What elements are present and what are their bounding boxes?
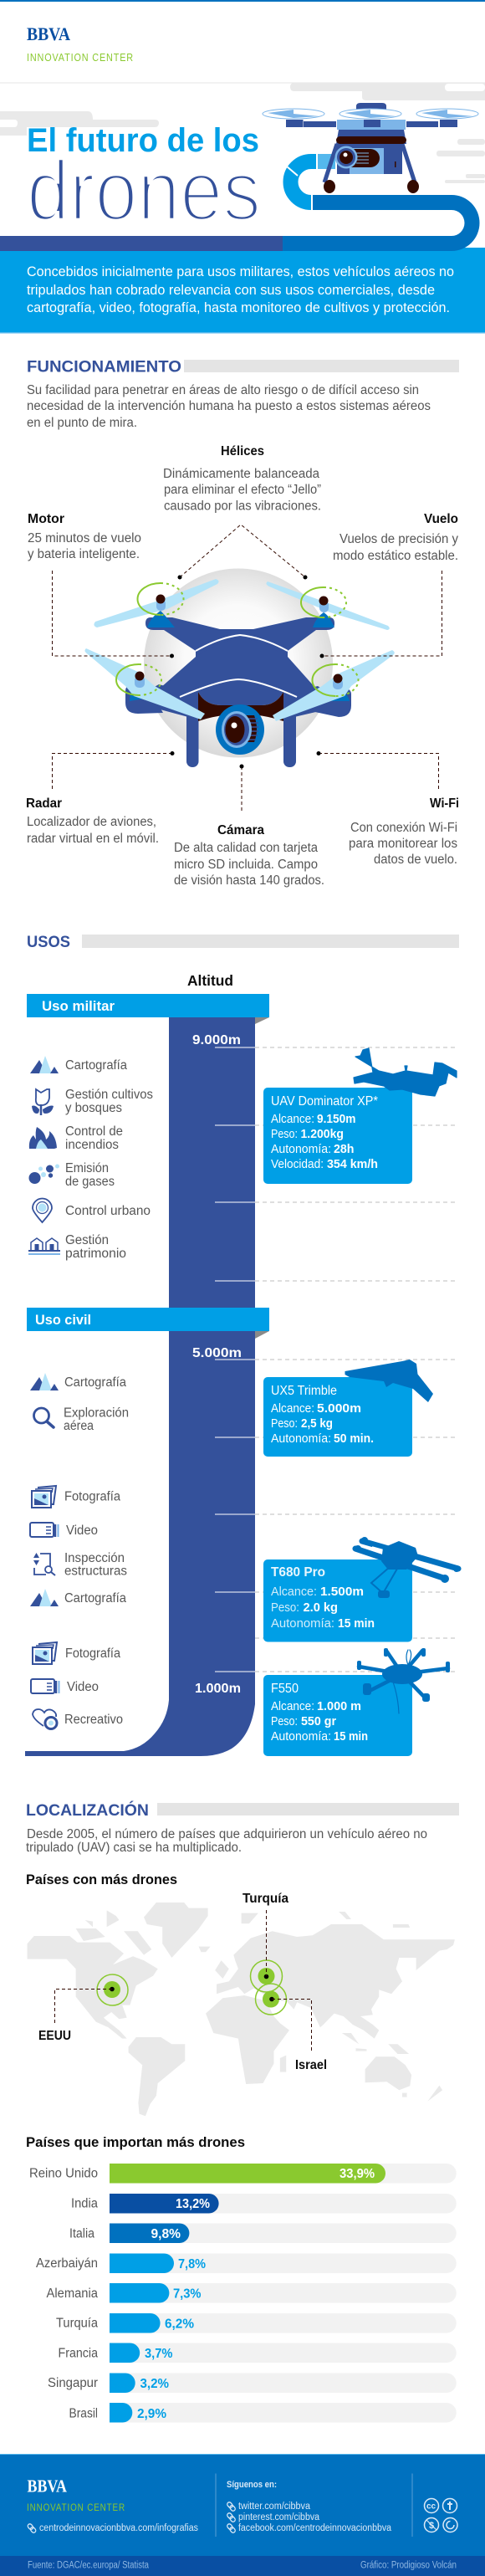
bar chart: drone importers: 2,9% <box>137 2407 166 2421</box>
drone card: F550: F550 <box>271 1682 299 1696</box>
map marker: EEUU: EEUU <box>38 2029 71 2043</box>
use item: Cartografía civil: Cartografía <box>64 1375 126 1390</box>
drone card: T680 Pro: 2.0 kg <box>303 1601 338 1615</box>
drone card: F550: Autonomía: <box>271 1730 331 1744</box>
callout: Wi-Fi: Wi-Fi <box>430 796 459 811</box>
label: 9.000m: 9.000m <box>192 1033 241 1047</box>
map marker: Turquía: Turquía <box>242 1892 288 1906</box>
footer logo: INNOVATION CENTER <box>27 2503 125 2513</box>
source and credits <box>28 2560 457 2570</box>
drone card: F550: 550 gr <box>301 1715 336 1728</box>
use item: Emisión de gases: de gases <box>65 1175 115 1189</box>
subheading: Países con más drones: Países con más drones <box>26 1872 177 1887</box>
drone card: UX5 Trimble <box>263 1377 412 1457</box>
drone card: UX5 Trimble: 2,5 kg <box>301 1417 333 1431</box>
bar chart: drone importers: 6,2% <box>165 2317 194 2331</box>
drone card: UAV Dominator XP: Alcance: <box>271 1113 314 1126</box>
use item: Control urbano <box>33 1198 151 1222</box>
use item: Exploración aérea: Exploración <box>64 1406 129 1421</box>
drone silhouette: F550 <box>357 1648 450 1713</box>
social links: pinterest.com/cibbva <box>238 2512 320 2522</box>
hero drone illustration <box>263 103 478 193</box>
funcionamiento intro text <box>27 383 431 430</box>
drone card: T680 Pro: 15 min <box>338 1617 375 1631</box>
section heading: Usos <box>27 933 459 951</box>
callout: Wi-Fi: Con conexión Wi-Fi <box>350 821 457 835</box>
use item: Recreativo <box>33 1709 123 1728</box>
use item: Gestión cultivos y bosques: Gestión cultivos <box>65 1088 153 1102</box>
use item: Inspección estructuras: Inspección <box>64 1551 125 1565</box>
drone card: UAV Dominator XP: 9.150m <box>317 1113 356 1126</box>
label: 1.000m: 1.000m <box>195 1682 241 1696</box>
drone card: F550: Alcance: <box>271 1700 314 1713</box>
bar chart: drone importers: Singapur <box>48 2376 98 2390</box>
callout: Wi-Fi <box>349 796 459 867</box>
callout: Cámara: de visión hasta 140 grados. <box>174 873 324 888</box>
use item: Gestión cultivos y bosques: y bosques <box>65 1101 122 1115</box>
social links <box>227 2480 392 2533</box>
drone card: UX5 Trimble: Autonomía: <box>271 1432 331 1446</box>
callout: Radar: Radar <box>26 796 62 811</box>
bar chart: drone importers: Italia <box>69 2227 94 2241</box>
callout: Motor <box>28 512 141 561</box>
callout: Vuelo <box>333 512 458 563</box>
use item: Emisión de gases <box>28 1161 115 1189</box>
use item: Fotografía civil 2: Fotografía <box>65 1646 120 1661</box>
hero intro text: tripulados han cobrado relevancia con sus usos comerciales, desde <box>27 283 435 298</box>
use item: Inspección estructuras <box>33 1551 127 1578</box>
callout: Vuelo: modo estático estable. <box>333 549 458 563</box>
subheading: Países que importan más drones: Países que importan más drones <box>26 2135 245 2150</box>
use item: Cartografía civil <box>30 1373 126 1390</box>
drone card: T680 Pro: Alcance: <box>271 1585 317 1599</box>
callout: Hélices: Hélices <box>221 444 264 458</box>
bar chart: drone importers: 13,2% <box>176 2197 210 2211</box>
source and credits: Fuente: DGAC/ec.europa/ Statista <box>28 2560 149 2570</box>
use item: Gestión cultivos y bosques <box>32 1088 153 1115</box>
drone silhouette: UAV Dominator <box>354 1048 457 1096</box>
hero title: drones <box>27 143 261 238</box>
drone card: UAV Dominator XP: Velocidad: <box>271 1158 324 1171</box>
use item: Cartografía <box>30 1056 127 1073</box>
drone card: UAV Dominator XP: 354 km/h <box>327 1158 378 1171</box>
drone card: UX5 Trimble: 5.000m <box>317 1402 361 1416</box>
drone card: F550: 1.000 m <box>317 1700 361 1713</box>
social links: twitter.com/cibbva <box>238 2502 311 2512</box>
callout: Hélices: causado por las vibraciones. <box>164 499 321 514</box>
banner: Uso civil: Uso civil <box>35 1312 91 1328</box>
callout: Hélices <box>163 444 321 514</box>
use item: Video civil 2 <box>31 1679 99 1694</box>
drone card: UAV Dominator XP: Peso: <box>271 1128 298 1141</box>
banner: Uso civil <box>27 1308 269 1339</box>
social links: Síguenos en: <box>227 2480 277 2490</box>
use item: Cartografía civil 2: Cartografía <box>64 1591 126 1606</box>
top accent bar <box>0 0 485 2</box>
drone card: T680 Pro: 1.500m <box>320 1585 364 1599</box>
use item: Fotografía civil <box>32 1486 120 1508</box>
source and credits: Gráfico: Prodigioso Volcán <box>360 2560 457 2570</box>
callout: Radar <box>26 796 159 846</box>
use item: Fotografía civil 2 <box>33 1642 120 1664</box>
callout: Hélices: Dinámicamente balanceada <box>163 467 319 481</box>
callout: Motor: y bateria inteligente. <box>28 547 140 561</box>
section heading: Funcionamiento: FUNCIONAMIENTO <box>27 358 181 376</box>
section heading: Funcionamiento <box>27 358 459 376</box>
use item: Fotografía civil: Fotografía <box>64 1489 120 1504</box>
bar chart: drone importers: 7,3% <box>173 2287 201 2301</box>
hero intro text: Concebidos inicialmente para usos militares, estos vehículos aéreos no <box>27 264 454 279</box>
use item: Gestión patrimonio: patrimonio <box>65 1247 126 1261</box>
footer logo: BBVA <box>27 2476 68 2497</box>
map marker: Israel <box>256 1984 327 2072</box>
callout: Cámara <box>174 823 324 888</box>
use item: Inspección estructuras: estructuras <box>64 1565 127 1578</box>
header logo: BBVA Innovation Center: INNOVATION CENTER <box>27 52 134 64</box>
use item: Emisión de gases: Emisión <box>65 1161 109 1175</box>
altitude grid lines <box>215 1047 457 1672</box>
drone card: T680 Pro: Autonomía: <box>271 1617 334 1631</box>
map marker: Turquía <box>242 1892 288 1992</box>
banner: Uso militar: Uso militar <box>42 998 115 1014</box>
callout: Wi-Fi: datos de vuelo. <box>374 853 457 867</box>
drone card: F550: Peso: <box>271 1715 298 1728</box>
drone card: UAV Dominator XP: UAV Dominator XP* <box>271 1094 378 1109</box>
callout: Wi-Fi: para monitorear los <box>349 837 457 851</box>
label: 5.000m: 5.000m <box>192 1346 242 1360</box>
callout: Motor: 25 minutos de vuelo <box>28 531 141 545</box>
drone card: UAV Dominator XP: 1.200kg <box>301 1128 344 1141</box>
use item: Exploración aérea <box>33 1406 129 1433</box>
drone card: UX5 Trimble: Peso: <box>271 1417 298 1431</box>
footer link: infografías: centrodeinnovacionbbva.com/infografias <box>39 2523 198 2533</box>
drone silhouette: T680 Pro <box>355 1537 460 1598</box>
bar chart: drone importers: 9,8% <box>151 2227 181 2241</box>
altitude axis title: Altitud <box>187 972 233 989</box>
banner: Uso militar <box>27 994 269 1024</box>
bar chart: drone importers: Alemania <box>47 2287 98 2301</box>
section heading: Localización <box>26 1800 459 1820</box>
use item: Gestión patrimonio <box>28 1233 126 1261</box>
use item: Control de incendios: incendios <box>65 1138 119 1152</box>
drone card: UAV Dominator XP: Autonomía: <box>271 1143 331 1156</box>
top-view quadcopter diagram <box>84 569 395 767</box>
bar chart: drone importers: Azerbaiyán <box>36 2256 98 2271</box>
callout: Cámara: micro SD incluida. Campo <box>174 858 318 872</box>
bar chart: drone importers: 33,9% <box>340 2167 375 2181</box>
drone card: UX5 Trimble: 50 min. <box>334 1432 374 1446</box>
bar chart: drone importers: Francia <box>59 2346 98 2361</box>
bar chart: drone importers: 7,8% <box>178 2257 206 2271</box>
world map <box>28 1903 455 2116</box>
use item: Control de incendios <box>29 1124 123 1152</box>
use item: Video civil 2: Video <box>67 1680 99 1694</box>
bar chart: drone importers: Brasil <box>69 2406 98 2421</box>
use item: Gestión patrimonio: Gestión <box>65 1233 109 1247</box>
use item: Control de incendios: Control de <box>65 1124 123 1139</box>
callout: Cámara: De alta calidad con tarjeta <box>174 841 318 855</box>
use item: Exploración aérea: aérea <box>64 1419 94 1433</box>
leader lines for the diagram callouts <box>52 525 442 811</box>
callout: Hélices: para eliminar el efecto “Jello” <box>164 483 321 497</box>
drone card: UX5 Trimble: Alcance: <box>271 1402 314 1416</box>
footer panel <box>0 2454 485 2576</box>
creative commons icons: cc <box>426 2502 436 2512</box>
bar chart: drone importers: Reino Unido <box>29 2167 98 2180</box>
hero intro text <box>27 264 454 315</box>
bar chart: drone importers: India <box>71 2197 98 2210</box>
footer logo <box>27 2476 125 2513</box>
drone card: F550 <box>263 1675 412 1756</box>
drone card: F550: 15 min <box>334 1730 368 1744</box>
section heading: Usos: USOS <box>27 933 70 951</box>
callout: Vuelo: Vuelo <box>424 512 458 526</box>
bar chart: drone importers: 3,2% <box>140 2377 169 2391</box>
drone card: UAV Dominator XP <box>263 1088 412 1184</box>
callout: Radar: Localizador de aviones, <box>27 815 156 829</box>
hero blue ribbon path <box>0 154 485 332</box>
altitude column <box>25 1017 255 1756</box>
callout: Radar: radar virtual en el móvil. <box>27 832 159 846</box>
funcionamiento intro text: en el punto de mira. <box>27 416 137 430</box>
use item: Video civil: Video <box>66 1524 98 1538</box>
use item: Video civil <box>30 1523 98 1538</box>
callout: Motor: Motor <box>28 512 64 526</box>
drone card: UX5 Trimble: UX5 Trimble <box>271 1384 337 1398</box>
header logo: BBVA Innovation Center: BBVA <box>27 23 70 44</box>
social links: facebook.com/centrodeinnovacionbbva <box>238 2523 392 2533</box>
localización intro text <box>26 1827 427 1855</box>
hero intro text: cartografía, video, fotografía, hasta monitoreo de cultivos y protección. <box>27 300 450 315</box>
use item: Cartografía civil 2 <box>30 1589 126 1606</box>
hero title: El futuro de los <box>27 122 259 159</box>
hero background clouds <box>0 83 485 183</box>
bar chart: drone importers <box>29 2164 457 2423</box>
drone card: T680 Pro <box>263 1559 412 1641</box>
map marker: EEUU <box>38 1974 128 2043</box>
localización intro text: tripulado (UAV) casi se ha multiplicado. <box>26 1841 242 1855</box>
drone card: UAV Dominator XP: 28h <box>334 1143 355 1156</box>
section heading: Localización: LOCALIZACIÓN <box>26 1800 149 1820</box>
creative commons icons: $ <box>429 2521 434 2531</box>
funcionamiento intro text: necesidad de la intervención humana ha puesto a estos sistemas aéreos <box>27 399 431 413</box>
use item: Cartografía: Cartografía <box>65 1058 127 1073</box>
callout: Cámara: Cámara <box>217 823 264 837</box>
creative commons icons <box>425 2498 457 2532</box>
callout: Vuelo: Vuelos de precisión y <box>340 532 458 546</box>
drone card: T680 Pro: Peso: <box>271 1601 299 1615</box>
funcionamiento intro text: Su facilidad para penetrar en áreas de alto riesgo o de difícil acceso sin <box>27 383 419 397</box>
drone silhouette: UX5 Trimble <box>345 1360 433 1402</box>
localización intro text: Desde 2005, el número de países que adquirieron un vehículo aéreo no <box>27 1827 427 1841</box>
drone card: T680 Pro: T680 Pro <box>271 1565 325 1580</box>
use item: Recreativo: Recreativo <box>64 1713 123 1727</box>
bar chart: drone importers: 3,7% <box>145 2347 172 2361</box>
map marker: Israel: Israel <box>295 2058 327 2072</box>
bar chart: drone importers: Turquía <box>56 2316 98 2331</box>
use item: Control urbano: Control urbano <box>65 1204 151 1218</box>
header logo: BBVA Innovation Center <box>27 23 134 64</box>
